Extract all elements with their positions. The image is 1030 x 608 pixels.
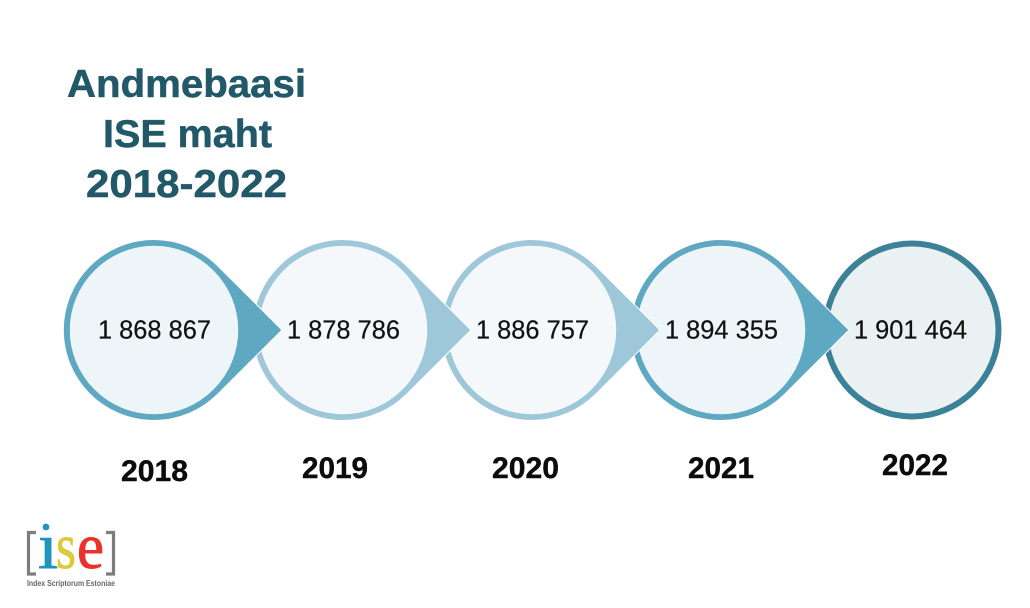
year label 2022: 2022 bbox=[882, 449, 948, 482]
title: 2018-2022 bbox=[86, 163, 287, 206]
teardrop circle: 2018 bbox=[63, 240, 282, 420]
year label 2018: 2018 bbox=[121, 455, 188, 488]
circle: 2022 bbox=[822, 240, 1002, 420]
value 2022: 1 901 464 bbox=[854, 316, 967, 344]
logo: ISE: ı bbox=[38, 511, 58, 583]
title: ISE maht bbox=[103, 113, 272, 156]
logo: ISE: Index Scriptorum Estoniae bbox=[27, 578, 115, 588]
logo: ISE bbox=[27, 511, 115, 588]
teardrop circle: 2019 bbox=[252, 240, 471, 420]
value 2019: 1 878 786 bbox=[287, 316, 400, 344]
value 2018: 1 868 867 bbox=[98, 316, 211, 344]
year label 2021: 2021 bbox=[688, 452, 754, 485]
value 2021: 1 894 355 bbox=[665, 316, 778, 344]
logo: ISE: s bbox=[56, 511, 76, 583]
year label 2020: 2020 bbox=[492, 452, 559, 485]
value 2020: 1 886 757 bbox=[476, 316, 589, 344]
teardrop circle: 2020 bbox=[441, 240, 660, 420]
teardrop circle: 2021 bbox=[630, 240, 849, 420]
title: Andmebaasi bbox=[67, 63, 306, 106]
logo: ISE: e bbox=[77, 511, 104, 583]
title bbox=[67, 63, 306, 206]
year label 2019: 2019 bbox=[302, 452, 368, 485]
